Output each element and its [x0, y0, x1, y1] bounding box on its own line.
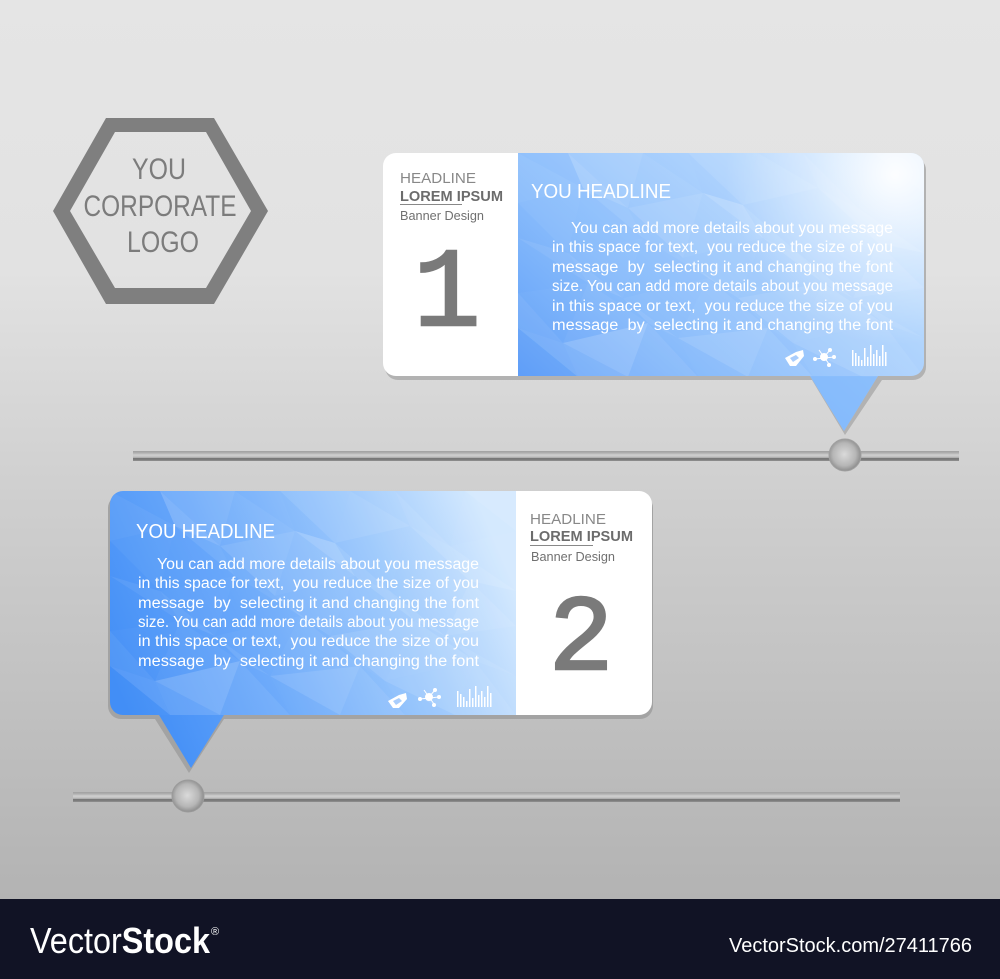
- card 2 body text: in this space for text, you reduce the size of you: [138, 575, 479, 592]
- card 1 body text: size. You can add more details about you message: [552, 278, 893, 295]
- timeline knob 2: [172, 780, 204, 812]
- card 1 body text: message by selecting it and changing the font: [552, 259, 894, 276]
- card 2 icon: handshake: [388, 693, 407, 708]
- card 1 headline: YOU HEADLINE: [531, 180, 671, 203]
- card 1 icon: handshake: [785, 350, 804, 366]
- card 1 body text: message by selecting it and changing the font: [552, 317, 894, 334]
- card 1 body text: in this space or text, you reduce the size of you: [552, 298, 893, 315]
- timeline knob 1: [829, 439, 861, 471]
- card 2 label block: HEADLINE: [530, 511, 606, 528]
- card 2 body text: in this space or text, you reduce the size of you: [138, 633, 479, 650]
- card 1 label block: LOREM IPSUM: [400, 188, 503, 205]
- logo placeholder: LOGO: [127, 226, 199, 259]
- footer registered mark: ®: [211, 926, 219, 938]
- card 1 number: 1: [413, 232, 481, 359]
- card 1 blue panel: [518, 153, 924, 433]
- card 1 body text: You can add more details about you message: [571, 220, 893, 237]
- card 2 label block: Banner Design: [531, 549, 615, 564]
- card 1 label block: [400, 170, 503, 223]
- card 1 body text: in this space for text, you reduce the size of you: [552, 239, 893, 256]
- card 2 body text: message by selecting it and changing the font: [138, 595, 480, 612]
- card 1 shadow: [385, 157, 926, 435]
- card 1 white panel: [383, 153, 518, 376]
- card 1 icon: network: [814, 348, 836, 366]
- timeline rail 1: [133, 451, 959, 461]
- callout card 1: [383, 153, 926, 435]
- card 2 white panel: [516, 491, 652, 715]
- card 2 blue panel: [110, 491, 516, 771]
- footer bar: [0, 899, 1000, 979]
- card 1 body text: [552, 220, 894, 334]
- card 2 label block: LOREM IPSUM: [530, 528, 633, 545]
- card 2 body text: You can add more details about you message: [157, 556, 479, 573]
- logo placeholder: YOU: [132, 153, 186, 186]
- card 2 body text: message by selecting it and changing the font: [138, 653, 480, 670]
- card 2 icon: network: [418, 688, 440, 706]
- logo placeholder: CORPORATE: [84, 190, 236, 223]
- card 1 icon: bar chart: [852, 345, 886, 366]
- logo placeholder: [53, 118, 268, 304]
- card 2 label block: [530, 511, 633, 564]
- card 1 label block: HEADLINE: [400, 170, 476, 187]
- card 2 body text: size. You can add more details about you message: [138, 614, 479, 631]
- timeline rail 2: [73, 792, 900, 802]
- card 2 shadow: [108, 495, 653, 773]
- footer brand logo: VectorStock: [30, 920, 211, 961]
- card 2 headline: YOU HEADLINE: [136, 520, 275, 543]
- callout card 2: [108, 491, 653, 773]
- card 2 icon: bar chart: [457, 686, 492, 707]
- footer image id: VectorStock.com/27411766: [729, 935, 972, 957]
- card 1 label block: Banner Design: [400, 208, 484, 223]
- card 2 number: 2: [549, 580, 613, 702]
- card 2 body text: [138, 556, 480, 670]
